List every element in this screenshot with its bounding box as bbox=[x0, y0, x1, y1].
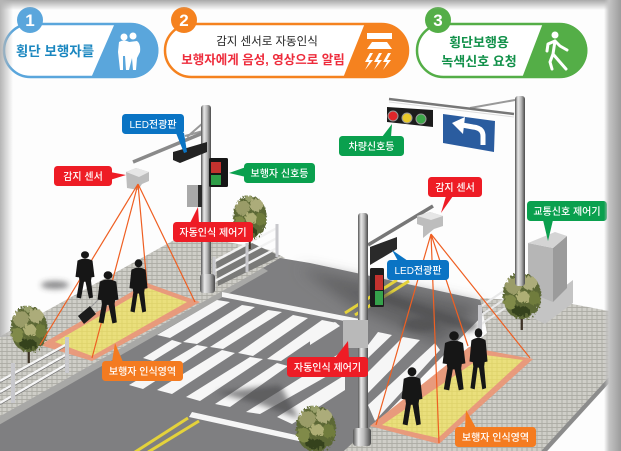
right rail bbox=[480, 290, 505, 337]
step 2 pill bbox=[165, 7, 408, 78]
left curb bbox=[0, 268, 268, 430]
label: recognition zone right bbox=[455, 410, 536, 447]
label: auto controller left bbox=[173, 207, 253, 242]
frame shadow top bbox=[0, 0, 621, 10]
arm bbox=[133, 133, 203, 162]
label: sensor left: 감지 센서 bbox=[63, 170, 103, 183]
right recognition zone bbox=[370, 347, 533, 444]
label: auto controller right bbox=[287, 341, 368, 377]
left signal pole assembly bbox=[126, 105, 228, 293]
LED sign bbox=[173, 142, 207, 163]
pedestrian front bbox=[402, 367, 422, 425]
suitcase bbox=[78, 298, 100, 324]
pole base bbox=[353, 428, 371, 446]
emphasis line: 보행자에게 음성, 영상으로 알림 bbox=[181, 52, 345, 67]
label: traffic controller: 교통신호 제어기 bbox=[533, 206, 601, 218]
badge bbox=[17, 7, 43, 33]
sensor unit bbox=[417, 212, 443, 238]
label: recognition zone right: 보행자 인식영역 bbox=[462, 431, 529, 444]
pill outline bbox=[417, 24, 586, 77]
double yellow centre line bbox=[132, 280, 409, 451]
pill fill bbox=[91, 23, 158, 78]
label: pedestrian signal bbox=[229, 163, 315, 183]
pill outline bbox=[4, 24, 157, 77]
pill fill bbox=[343, 23, 408, 78]
zone yellow pad bbox=[55, 288, 187, 356]
pole bbox=[201, 105, 211, 277]
auto controller box bbox=[187, 185, 202, 207]
left pedestrians bbox=[76, 251, 148, 324]
badge: 1 bbox=[25, 11, 35, 30]
right pedestrians bbox=[402, 328, 488, 425]
cabinet side bbox=[553, 236, 567, 302]
tree: upper bbox=[233, 196, 267, 249]
zone border bbox=[370, 347, 533, 444]
zone border bbox=[40, 283, 200, 361]
badge bbox=[425, 7, 451, 33]
label: pedestrian signal: 보행자 신호등 bbox=[251, 168, 308, 180]
road surface bbox=[0, 258, 495, 451]
turn direction sign bbox=[443, 114, 495, 152]
tree: lower centre bbox=[296, 406, 336, 451]
pill outline bbox=[165, 24, 408, 77]
zone yellow pad bbox=[382, 355, 523, 438]
label: vehicle signal bbox=[339, 124, 404, 156]
mast pole bbox=[515, 96, 525, 286]
heading: 횡단 보행자를 bbox=[16, 44, 94, 59]
right sidewalk outer edge bbox=[533, 364, 621, 451]
label: sensor right bbox=[428, 177, 482, 213]
icon: sensor with signal bolts bbox=[365, 33, 392, 70]
icon: walking person bbox=[547, 32, 567, 69]
frame shadow left bbox=[0, 0, 13, 337]
pedestrian signal bbox=[370, 268, 384, 307]
label: LED sign right: LED전광판 bbox=[394, 264, 442, 277]
pole bbox=[358, 213, 368, 433]
sensor unit bbox=[126, 168, 149, 190]
right signal pole assembly bbox=[343, 206, 443, 446]
heading line two: 녹색신호 요청 bbox=[441, 54, 517, 69]
heading line one: 횡단보행용 bbox=[449, 35, 509, 50]
pedestrian bbox=[76, 251, 94, 299]
shaded area behind upper rail bbox=[216, 243, 280, 286]
label: recognition zone left bbox=[102, 343, 183, 381]
beam brace bbox=[185, 123, 203, 137]
step 1 pill bbox=[4, 7, 158, 78]
vehicle signal mast bbox=[387, 96, 525, 286]
frame shadow right bbox=[604, 0, 621, 451]
left sensor beams bbox=[40, 184, 195, 358]
LED sign bbox=[370, 237, 397, 265]
label: LED sign right bbox=[387, 250, 449, 280]
road shadows bbox=[41, 281, 480, 430]
label: recognition zone left: 보행자 인식영역 bbox=[109, 365, 176, 378]
left rail bbox=[0, 337, 67, 404]
mast brace bbox=[470, 100, 515, 108]
step 3 pill bbox=[417, 7, 588, 78]
cabinet top bbox=[528, 232, 567, 248]
badge bbox=[171, 7, 197, 33]
label: traffic controller bbox=[527, 201, 607, 241]
label: LED sign left bbox=[122, 114, 187, 153]
traffic light bbox=[387, 107, 433, 127]
mast arm bbox=[389, 99, 514, 114]
pedestrian signal bbox=[209, 158, 228, 187]
left sidewalk bbox=[0, 234, 285, 424]
label: auto controller right: 자동인식 제어기 bbox=[294, 362, 361, 374]
pedestrian right bbox=[469, 328, 488, 389]
badge: 2 bbox=[179, 11, 189, 30]
cabinet front bbox=[528, 243, 553, 302]
auto controller box bbox=[343, 320, 368, 348]
label: sensor right: 감지 센서 bbox=[435, 181, 475, 194]
tree: lower left bbox=[11, 306, 47, 363]
cabinet base bbox=[522, 280, 573, 324]
pole base bbox=[200, 274, 215, 293]
label: LED sign left: LED전광판 bbox=[129, 118, 177, 131]
crosswalk bbox=[129, 292, 440, 442]
label: vehicle signal: 차량신호등 bbox=[348, 140, 394, 153]
label: sensor left bbox=[54, 166, 126, 186]
right sidewalk bbox=[334, 298, 621, 451]
icon: couple bbox=[118, 32, 140, 70]
street scene bbox=[0, 96, 621, 451]
badge: 3 bbox=[433, 11, 443, 30]
pill fill bbox=[522, 23, 588, 78]
arm bbox=[368, 206, 433, 245]
right sensor beams bbox=[376, 234, 530, 443]
traffic controller cabinet bbox=[522, 232, 573, 324]
far road dark shade bbox=[300, 268, 480, 345]
pedestrian with suitcase bbox=[98, 271, 118, 323]
left recognition zone bbox=[40, 283, 200, 361]
caption line: 감지 센서로 자동인식 bbox=[216, 35, 318, 48]
label: auto controller left: 자동인식 제어기 bbox=[179, 227, 247, 239]
pedestrian woman bbox=[129, 259, 148, 312]
upper rail bbox=[213, 224, 277, 290]
pedestrian middle bbox=[443, 331, 465, 390]
tree: right bbox=[503, 273, 541, 330]
